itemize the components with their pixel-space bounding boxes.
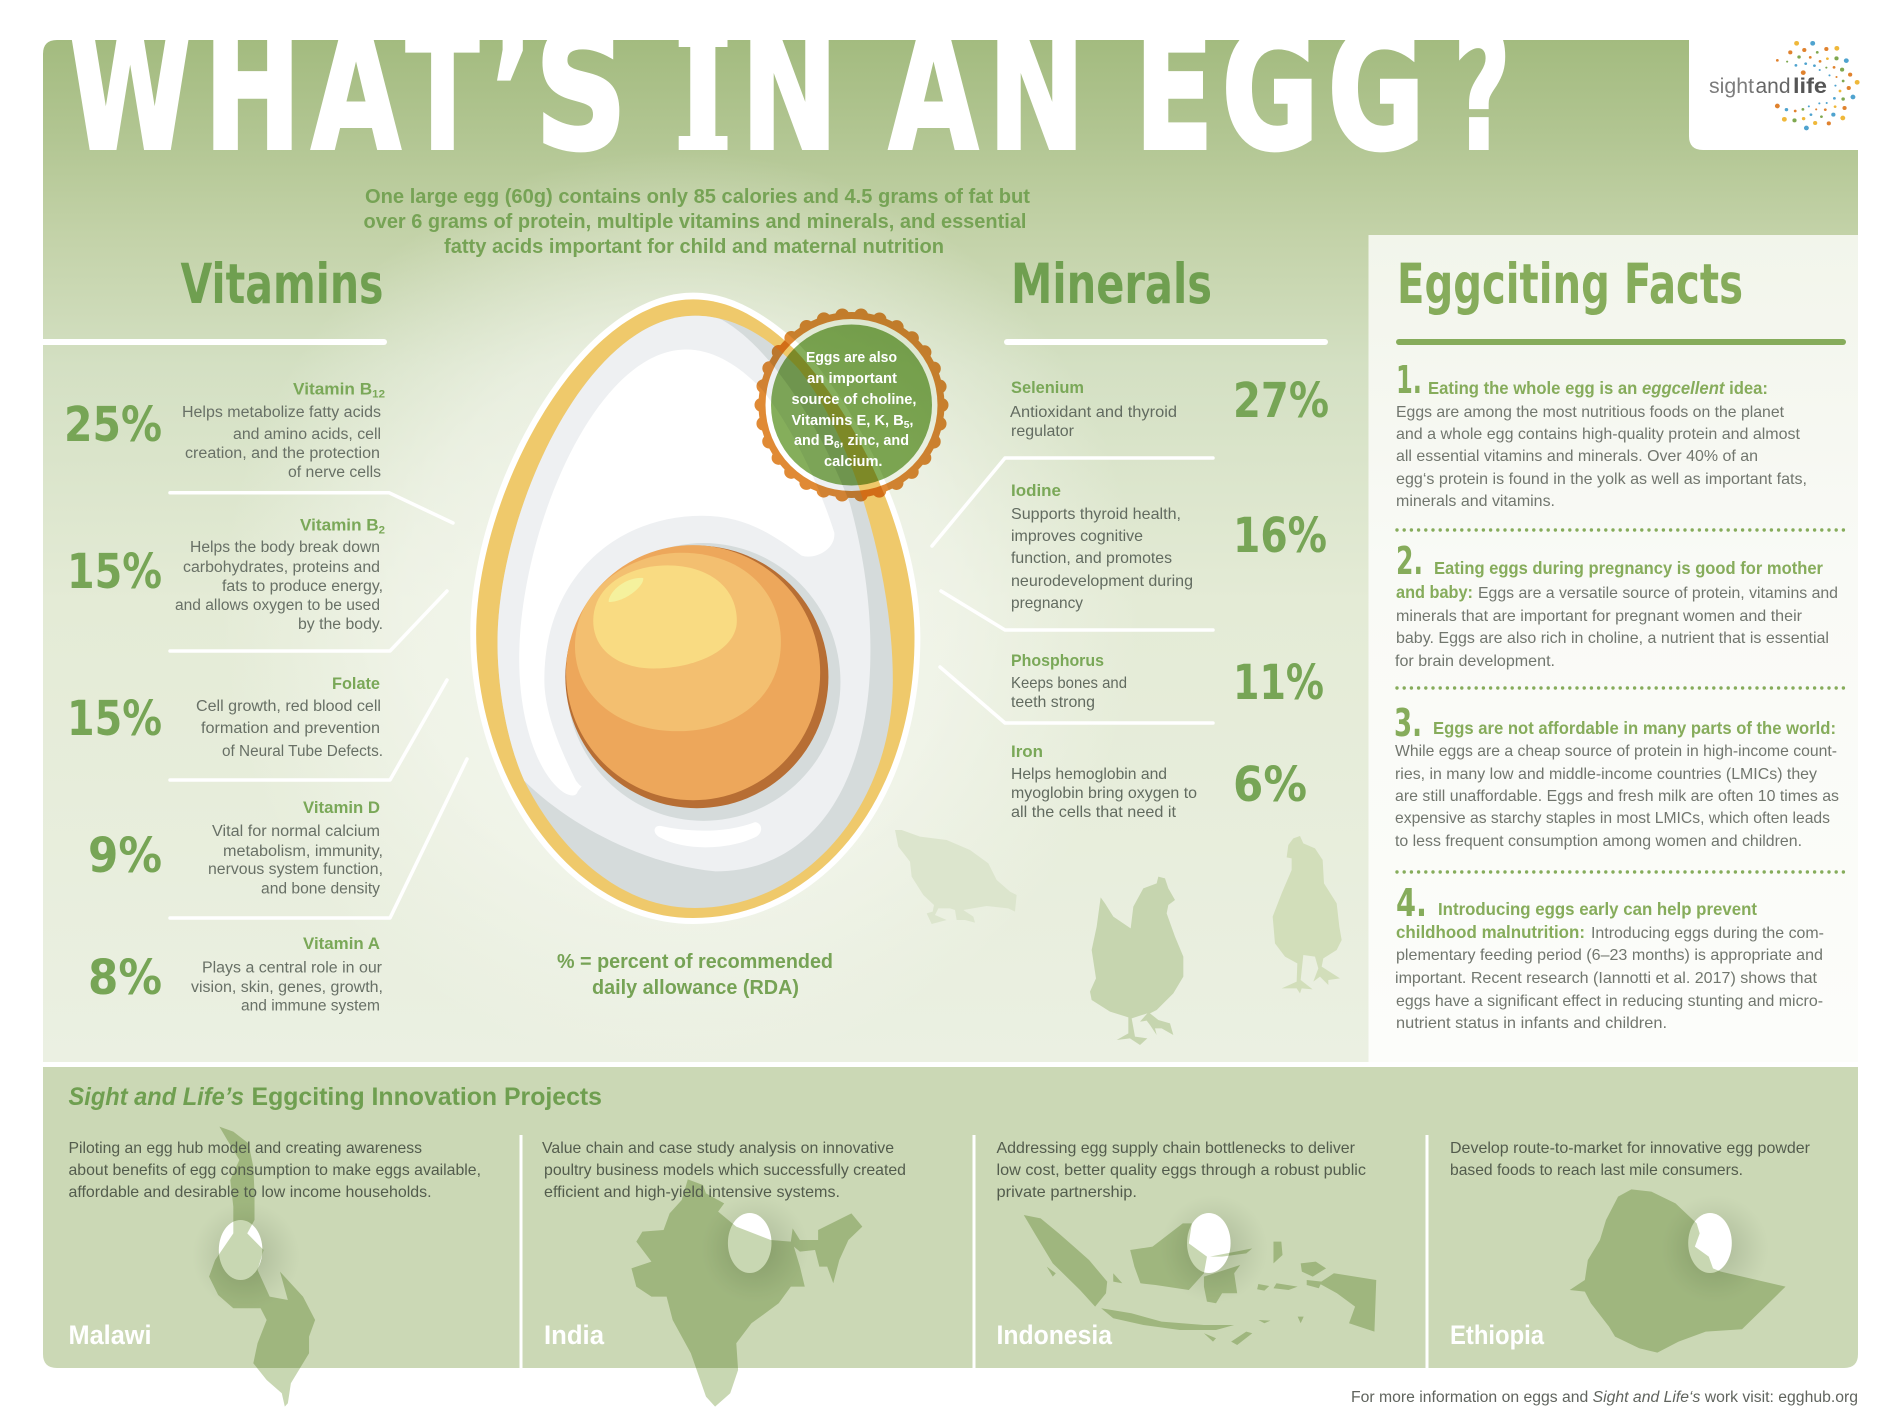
vitamin D: and bone density xyxy=(261,880,380,898)
title: G xyxy=(1328,0,1425,188)
vitamin A: 8% xyxy=(88,950,162,1006)
callout badge: choline and other nutrients xyxy=(758,312,944,498)
fact 2: for brain development. xyxy=(1395,653,1555,670)
vitamin B12 xyxy=(64,380,385,481)
icon: hens xyxy=(895,830,1342,1045)
callout badge: choline and other nutrients: and B xyxy=(794,433,834,449)
project: Ethiopia: based foods to reach last mile consumers. xyxy=(1450,1162,1743,1179)
title: W xyxy=(68,0,193,188)
project: Indonesia: Indonesia xyxy=(996,1320,1112,1350)
selenium: Selenium xyxy=(1011,379,1084,397)
vitamin D: Vitamin D xyxy=(303,799,380,817)
title xyxy=(68,0,1510,188)
fact 3: are still unaffordable. Eggs and fresh milk are often 10 times as xyxy=(1395,788,1839,805)
folate: formation and prevention xyxy=(201,720,380,737)
fact 3: to less frequent consumption among women and children. xyxy=(1395,833,1802,850)
title: ? xyxy=(1454,0,1510,188)
title: ’ xyxy=(492,0,532,188)
title: E xyxy=(1135,0,1214,188)
phosphorus xyxy=(1011,652,1324,711)
panel: header and main background xyxy=(43,40,1858,1062)
fact 3: ries, in many low and middle-income countries (LMICs) they xyxy=(1395,766,1817,783)
fact 4: Introducing eggs during the com- xyxy=(1591,925,1824,942)
title: S xyxy=(535,0,627,188)
vitamin D: metabolism, immunity, xyxy=(223,843,383,860)
heading: innovation projects: Eggciting Innovation Projects xyxy=(252,1083,602,1111)
vitamin B2: Helps the body break down xyxy=(190,539,380,556)
vitamin A xyxy=(88,935,383,1014)
fact 2: baby. Eggs are also rich in choline, a nutrient that is essential xyxy=(1396,630,1829,647)
vitamin B12: creation, and the protection xyxy=(185,445,380,462)
project: Malawi: Piloting an egg hub model and creating awareness xyxy=(68,1140,422,1157)
fact 2: minerals that are important for pregnant women and their xyxy=(1396,608,1803,625)
title: A xyxy=(312,0,400,188)
fact 1: all essential vitamins and minerals. Over 40% of an xyxy=(1396,448,1758,465)
vitamin A: vision, skin, genes, growth, xyxy=(191,979,383,996)
RDA note: daily allowance (RDA) xyxy=(592,977,799,999)
fact 4: Introducing eggs early can help prevent xyxy=(1438,899,1757,919)
project: Malawi xyxy=(68,1127,481,1407)
fact 3: Eggs are not affordable in many parts of the world: xyxy=(1433,718,1836,738)
vitamin D xyxy=(88,799,383,898)
title: N xyxy=(741,0,838,188)
vitamin D: Vital for normal calcium xyxy=(212,823,380,840)
intro text xyxy=(364,185,1030,258)
vitamin B2: by the body. xyxy=(298,616,383,633)
vitamin B2: carbohydrates, proteins and xyxy=(183,559,380,576)
vitamin B2: Vitamin B xyxy=(300,516,376,534)
vitamin A: and immune system xyxy=(241,998,380,1014)
fact 4: eggs have a significant effect in reducing stunting and micro- xyxy=(1396,993,1823,1010)
selenium: 27% xyxy=(1233,373,1329,429)
callout badge: choline and other nutrients: an important xyxy=(807,371,897,387)
fact 2 xyxy=(1395,539,1838,670)
heading: eggciting facts: Eggciting Facts xyxy=(1397,252,1743,316)
project: Ethiopia: Develop route-to-market for innovative egg powder xyxy=(1450,1140,1811,1157)
fact 1: Eggs are among the most nutritious foods on the planet xyxy=(1396,404,1785,421)
fact 3: While eggs are a cheap source of protein in high-income count- xyxy=(1395,743,1837,760)
panel: minerals xyxy=(932,252,1329,821)
panel: vitamins xyxy=(43,252,467,1014)
iron: all the cells that need it xyxy=(1011,804,1177,821)
vitamin B12: Helps metabolize fatty acids xyxy=(182,404,381,421)
fact 3: 3. xyxy=(1394,701,1422,745)
vitamin B12: 25% xyxy=(64,397,162,453)
project: Indonesia xyxy=(996,1140,1376,1350)
fact 2: 2. xyxy=(1396,539,1423,583)
folate: Folate xyxy=(332,675,380,693)
title: N xyxy=(988,0,1085,188)
iodine xyxy=(1011,482,1327,612)
project: Indonesia: low cost, better quality eggs through a robust public xyxy=(996,1162,1366,1179)
folate: Cell growth, red blood cell xyxy=(196,698,381,715)
fact 3 xyxy=(1394,701,1839,850)
heading: innovation projects: Sight and Life’s xyxy=(68,1083,244,1111)
iron xyxy=(1011,743,1307,821)
vitamin B2: fats to produce energy, xyxy=(222,578,383,595)
fact 4 xyxy=(1395,881,1824,1032)
phosphorus: Phosphorus xyxy=(1011,652,1104,670)
iron: Helps hemoglobin and xyxy=(1011,766,1167,783)
fact 1: 1. xyxy=(1396,358,1422,402)
title: A xyxy=(889,0,978,188)
project: Malawi: about benefits of egg consumption to make eggs available, xyxy=(68,1162,481,1179)
folate: of Neural Tube Defects. xyxy=(222,743,383,760)
iodine: Iodine xyxy=(1011,482,1061,500)
project: India: poultry business models which successfully created xyxy=(544,1162,906,1179)
vitamin B12: 12 xyxy=(372,388,385,400)
iodine: pregnancy xyxy=(1011,595,1083,612)
fact 1: and a whole egg contains high-quality protein and almost xyxy=(1396,426,1801,443)
phosphorus: 11% xyxy=(1233,655,1324,711)
folate: 15% xyxy=(67,691,162,747)
fact 2: and baby: xyxy=(1396,582,1473,602)
title: H xyxy=(204,0,301,188)
fact 2: Eating eggs during pregnancy is good for mother xyxy=(1434,558,1823,578)
iodine: function, and promotes xyxy=(1011,550,1172,567)
vitamin D: nervous system function, xyxy=(208,861,383,878)
callout badge: choline and other nutrients: , zinc, and xyxy=(839,433,909,449)
iron: myoglobin bring oxygen to xyxy=(1011,785,1197,802)
fact 1: egg‘s protein is found in the yolk as well as important fats, xyxy=(1396,471,1807,488)
fact 1: Eating the whole egg is an eggcellent idea: xyxy=(1428,378,1768,398)
map: Indonesia xyxy=(1024,1215,1376,1345)
title: T xyxy=(406,0,479,188)
heading: minerals: Minerals xyxy=(1011,252,1212,316)
iodine: improves cognitive xyxy=(1011,528,1143,545)
selenium xyxy=(1010,373,1329,440)
vitamin B12: and amino acids, cell xyxy=(233,426,381,443)
iodine: 16% xyxy=(1233,508,1327,564)
fact 4: nutrient status in infants and children. xyxy=(1396,1015,1667,1032)
project: India: Value chain and case study analysis on innovative xyxy=(542,1140,894,1157)
fact 4: plementary feeding period (6–23 months) is appropriate and xyxy=(1396,947,1823,964)
illustration: egg xyxy=(470,293,920,924)
phosphorus: Keeps bones and xyxy=(1011,675,1127,692)
vitamin B12: of nerve cells xyxy=(288,464,381,481)
intro text: One large egg (60g) contains only 85 calories and 4.5 grams of fat but xyxy=(365,185,1030,208)
folate xyxy=(67,675,383,760)
background glow behind egg xyxy=(308,180,1052,928)
fact 3: expensive as starchy staples in most LMICs, which often leads xyxy=(1395,810,1830,827)
heading: innovation projects xyxy=(68,1083,602,1111)
callout badge: choline and other nutrients: Vitamins E, K, B xyxy=(792,413,902,429)
panel: eggciting facts xyxy=(1368,235,1858,1062)
vitamin B2: 2 xyxy=(379,524,385,536)
project: India: India xyxy=(544,1320,604,1350)
RDA note xyxy=(557,951,833,999)
logo: sight and life xyxy=(1709,41,1860,130)
callout badge: choline and other nutrients: calcium. xyxy=(824,454,882,470)
project: Malawi: affordable and desirable to low income households. xyxy=(68,1184,432,1201)
callout badge: choline and other nutrients: , xyxy=(909,413,914,429)
callout badge: choline and other nutrients: 5 xyxy=(904,420,910,431)
vitamin A: Plays a central role in our xyxy=(202,960,382,976)
vitamin B2: 15% xyxy=(67,544,162,600)
vitamin D: 9% xyxy=(88,828,162,884)
fact 1: minerals and vitamins. xyxy=(1396,493,1555,510)
project: India: efficient and high-yield intensive systems. xyxy=(544,1184,840,1201)
logo: sight and life: sight xyxy=(1709,75,1754,98)
selenium: regulator xyxy=(1011,423,1075,440)
title: G xyxy=(1222,0,1319,188)
fact 4: 4. xyxy=(1396,881,1427,925)
map: Malawi xyxy=(209,1127,315,1407)
fact 1 xyxy=(1396,358,1807,510)
footer note: For more information on eggs and Sight and Life‘s work visit: egghub.org xyxy=(1351,1389,1858,1406)
project: Indonesia: Addressing egg supply chain bottlenecks to deliver xyxy=(996,1140,1356,1157)
callout badge: choline and other nutrients: 6 xyxy=(834,440,840,451)
fact 2: Eggs are a versatile source of protein, vitamins and xyxy=(1478,585,1838,602)
iodine: Supports thyroid health, xyxy=(1011,506,1181,523)
heading: vitamins: Vitamins xyxy=(180,252,384,316)
intro text: over 6 grams of protein, multiple vitamins and minerals, and essential xyxy=(364,210,1026,233)
selenium: Antioxidant and thyroid xyxy=(1010,404,1177,421)
panel: logo cutout xyxy=(1689,39,1859,150)
logo: sight and life: and xyxy=(1756,75,1790,98)
callout badge: choline and other nutrients: Eggs are also xyxy=(806,350,897,366)
title: I xyxy=(681,0,725,188)
intro text: fatty acids important for child and maternal nutrition xyxy=(444,235,944,258)
vitamin B2: and allows oxygen to be used xyxy=(175,597,380,614)
iron: Iron xyxy=(1011,743,1043,761)
panel: innovation projects xyxy=(43,1067,1858,1407)
callout badge: choline and other nutrients: source of choline, xyxy=(792,392,916,408)
RDA note: % = percent of recommended xyxy=(557,951,833,973)
logo: sight and life: life xyxy=(1793,75,1827,98)
phosphorus: teeth strong xyxy=(1011,694,1095,711)
project: Malawi: Malawi xyxy=(68,1320,152,1350)
iron: 6% xyxy=(1233,757,1307,813)
vitamin B12: Vitamin B xyxy=(293,380,369,398)
project: Ethiopia: Ethiopia xyxy=(1450,1320,1544,1350)
vitamin B2 xyxy=(67,516,385,633)
project: Indonesia: private partnership. xyxy=(996,1184,1137,1201)
project: Ethiopia xyxy=(1450,1140,1811,1353)
iodine: neurodevelopment during xyxy=(1011,573,1193,590)
map: India xyxy=(631,1179,862,1407)
map: Ethiopia xyxy=(1570,1189,1786,1353)
fact 4: childhood malnutrition: xyxy=(1396,922,1585,942)
vitamin A: Vitamin A xyxy=(303,935,380,953)
project: India xyxy=(542,1140,906,1407)
fact 4: important. Recent research (Iannotti et al. 2017) shows that xyxy=(1395,970,1818,987)
